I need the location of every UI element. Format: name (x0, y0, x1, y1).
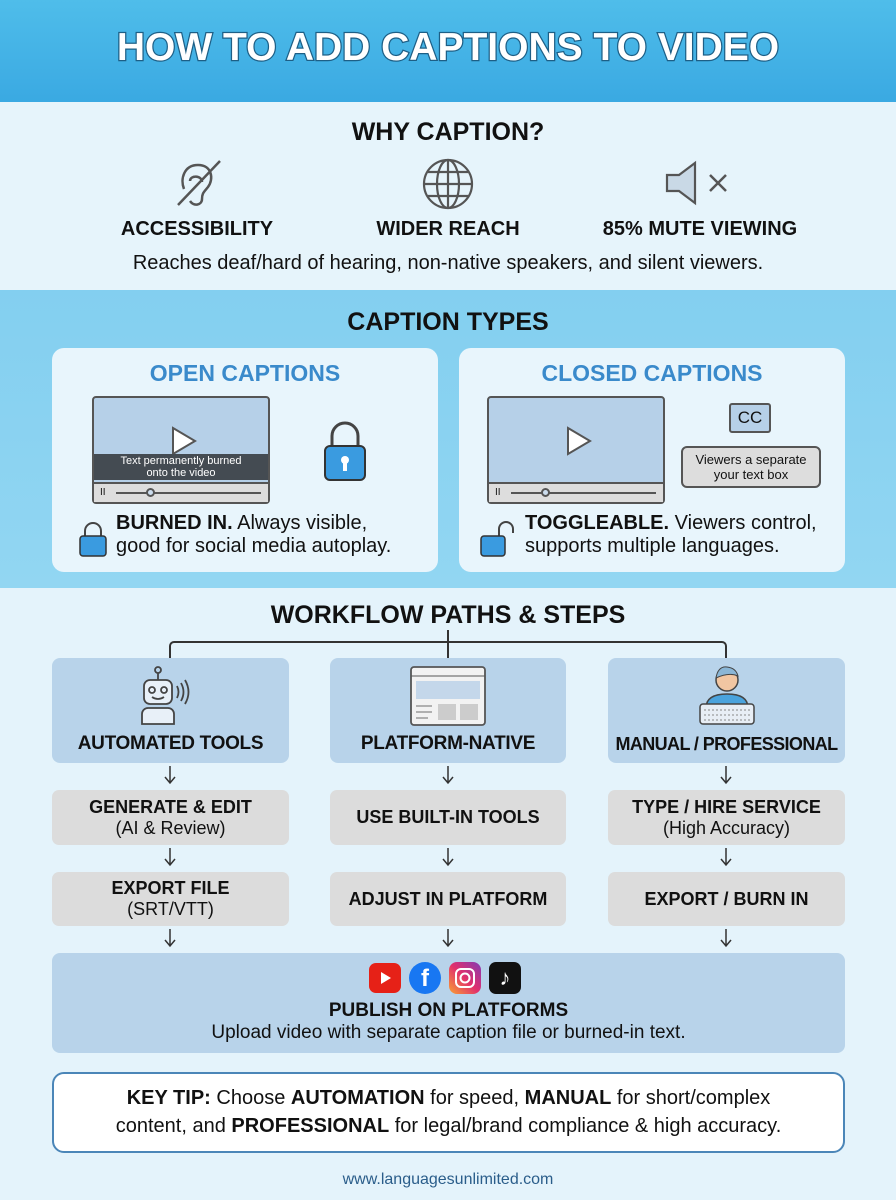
arrows row 3 (164, 929, 176, 947)
label: wider reach: WIDER REACH (376, 218, 520, 240)
icons: social platforms: f (421, 965, 429, 992)
heading: why caption: WHY CAPTION? (352, 118, 544, 146)
step: generate & edit: (AI & Review) (115, 818, 226, 838)
heading: open captions: OPEN CAPTIONS (150, 360, 340, 386)
heading: workflow: WORKFLOW PATHS & STEPS (271, 601, 625, 629)
label: mute viewing: 85% MUTE VIEWING (603, 218, 797, 240)
step: use built-in tools (330, 790, 566, 845)
step: type / hire service (608, 790, 845, 845)
panel: publish (52, 953, 845, 1053)
text: burned in (79, 512, 391, 557)
callout: key tip (52, 1072, 845, 1153)
step: type / hire service: (High Accuracy) (663, 818, 790, 838)
panel: closed captions: TOGGLEABLE. Viewers control, (525, 512, 817, 534)
step: use built-in tools: USE BUILT-IN TOOLS (356, 807, 540, 827)
label: publish: PUBLISH ON PLATFORMS (329, 1000, 568, 1021)
step: export file: EXPORT FILE (111, 878, 230, 898)
section: why caption (0, 102, 896, 290)
icon: browser (410, 666, 486, 726)
text: toggleable (480, 512, 817, 557)
label: accessibility: ACCESSIBILITY (121, 218, 273, 240)
step: export file: (SRT/VTT) (127, 899, 214, 919)
heading: caption types: CAPTION TYPES (347, 308, 549, 336)
icon: CC: CC (738, 408, 762, 427)
video player: closed (487, 396, 665, 504)
icons: social platforms (369, 962, 521, 994)
panel: open captions: BURNED IN. Always visible, (116, 512, 367, 534)
video player: open: Text permanently burned (120, 455, 242, 467)
callout: speech bubble (681, 446, 821, 488)
icon: ear (177, 160, 221, 206)
panel: closed captions (459, 348, 845, 572)
callout: key tip: KEY TIP: Choose AUTOMATION for speed, MANUAL for short/complex (127, 1087, 770, 1109)
heading: closed captions: CLOSED CAPTIONS (541, 360, 763, 386)
label: platform-native: PLATFORM-NATIVE (361, 733, 535, 754)
icon: lock (324, 422, 366, 481)
callout: speech bubble: Viewers a separate (695, 452, 807, 467)
text: reach sentence: Reaches deaf/hard of hearing, non-native speakers, and silent viewers. (133, 252, 763, 274)
panel: closed captions: supports multiple languages. (525, 535, 780, 557)
column: automated (52, 658, 289, 763)
icon: globe (422, 158, 474, 210)
section: caption types (0, 290, 896, 588)
step: generate & edit (52, 790, 289, 845)
video player: closed: II (495, 487, 501, 498)
step: export file (52, 872, 289, 926)
arrows row 2 (164, 848, 176, 866)
icon: muted speaker (666, 160, 727, 206)
video player: open: onto the video (146, 467, 216, 479)
step: type / hire service: TYPE / HIRE SERVICE (632, 796, 821, 816)
step: export / burn in (608, 872, 845, 926)
icon: robot (141, 666, 190, 725)
label: manual / professional: MANUAL / PROFESSIONAL (615, 734, 838, 754)
callout: speech bubble: your text box (714, 467, 788, 482)
title: HOW TO ADD CAPTIONS TO VIDEO (117, 26, 779, 69)
icon: person typing (699, 666, 755, 725)
video player: open (92, 396, 270, 504)
callout: key tip: content, and PROFESSIONAL for legal/brand compliance & high accuracy. (116, 1115, 781, 1137)
footer: www.languagesunlimited.com (343, 1171, 553, 1188)
tree connector (169, 630, 727, 658)
text: upload: Upload video with separate caption file or burned-in text. (211, 1022, 686, 1043)
icon: CC (729, 403, 771, 433)
step: adjust in platform: ADJUST IN PLATFORM (349, 888, 547, 908)
step: export / burn in: EXPORT / BURN IN (644, 888, 808, 908)
column: platform-native (330, 658, 566, 763)
video player: open: II (100, 487, 106, 498)
panel: open captions (52, 348, 438, 572)
column: manual (608, 658, 845, 763)
label: automated tools: AUTOMATED TOOLS (78, 733, 263, 754)
icons: social platforms: ♪ (500, 965, 510, 990)
arrows row 1 (164, 766, 176, 784)
step: generate & edit: GENERATE & EDIT (89, 796, 252, 816)
header (0, 0, 896, 102)
panel: open captions: good for social media autoplay. (116, 535, 391, 557)
step: adjust in platform (330, 872, 566, 926)
